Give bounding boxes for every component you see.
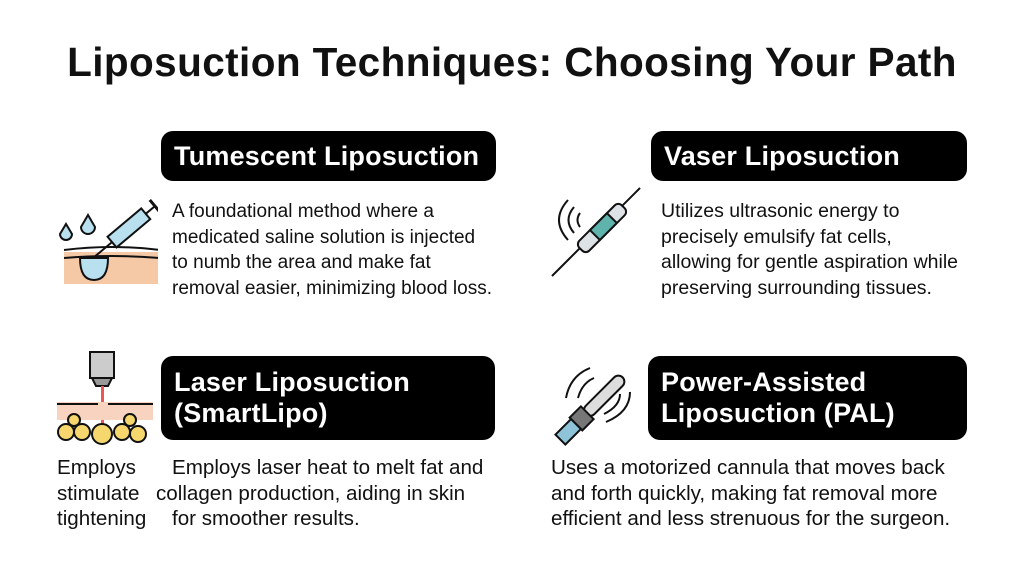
pill: laser: (SmartLipo) bbox=[174, 398, 328, 428]
text: PAL: and forth quickly, making fat removal more bbox=[551, 482, 937, 504]
icon: power-assisted cannula bbox=[554, 367, 631, 446]
pill: tumescent: Tumescent Liposuction bbox=[174, 140, 479, 170]
text: laser: Employs laser heat to melt fat and bbox=[172, 456, 483, 479]
pill: laser: Laser Liposuction bbox=[174, 367, 410, 397]
pill: vaser bbox=[651, 131, 967, 181]
text: laser left fragment: stimulate bbox=[57, 482, 139, 504]
text: laser left fragment: Employs bbox=[57, 456, 136, 479]
pill: PAL: Power-Assisted bbox=[661, 367, 866, 397]
text: tumescent: removal easier, minimizing blood loss. bbox=[172, 278, 492, 299]
text: PAL bbox=[551, 456, 950, 530]
text: tumescent: medicated saline solution is injected bbox=[172, 227, 475, 248]
icon: vaser probe bbox=[551, 187, 641, 277]
icon: laser bbox=[57, 351, 153, 445]
text: vaser: preserving surrounding tissues. bbox=[661, 277, 932, 299]
text: tumescent bbox=[172, 201, 492, 299]
title: Liposuction Techniques: Choosing Your Path bbox=[67, 39, 957, 85]
text: laser: for smoother results. bbox=[172, 507, 360, 530]
icon: tumescent syringe bbox=[59, 199, 158, 284]
pill: PAL bbox=[648, 356, 967, 440]
text: laser bbox=[156, 456, 483, 530]
text: laser: collagen production, aiding in skin bbox=[156, 482, 465, 504]
text: PAL: Uses a motorized cannula that moves back bbox=[551, 456, 945, 479]
text: vaser: Utilizes ultrasonic energy to bbox=[661, 200, 899, 222]
text: vaser: allowing for gentle aspiration while bbox=[661, 251, 958, 273]
text: PAL: efficient and less strenuous for the surgeon. bbox=[551, 507, 950, 530]
pill: PAL: Liposuction (PAL) bbox=[661, 398, 895, 428]
text: vaser: precisely emulsify fat cells, bbox=[661, 226, 892, 248]
pill: vaser: Vaser Liposuction bbox=[664, 140, 900, 170]
pill: tumescent bbox=[161, 131, 496, 181]
text: tumescent: A foundational method where a bbox=[172, 201, 434, 222]
pill: laser bbox=[161, 356, 495, 440]
text: vaser bbox=[661, 200, 958, 299]
text: laser left fragment: tightening bbox=[57, 507, 146, 530]
text: laser left fragment bbox=[57, 456, 146, 530]
text: tumescent: to numb the area and make fat bbox=[172, 252, 431, 273]
